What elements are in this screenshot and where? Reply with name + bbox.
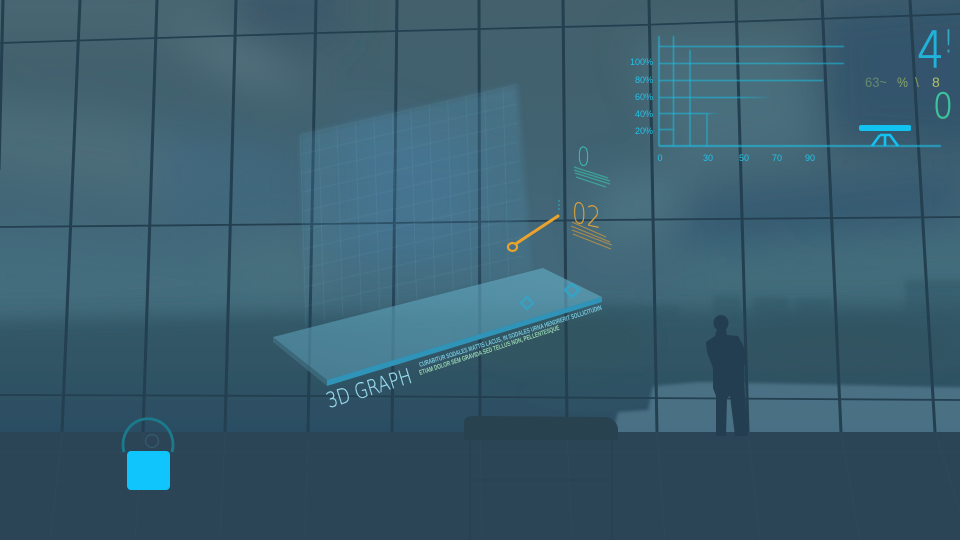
chart y axis labels: 60% [635, 92, 653, 102]
chart x axis labels: 50 [739, 153, 749, 163]
chart x axis labels: 90 [805, 153, 815, 163]
icon: padlock [123, 419, 173, 490]
caption text: ETIAM DOLOR SEM GRAVIDA SED TELLUS NON, PELLENTESQUE [418, 325, 561, 377]
chart y axis labels: 80% [635, 75, 653, 85]
chart y axis labels [630, 57, 653, 136]
chart x axis labels: 0 [657, 153, 663, 163]
readout text: 63~ [865, 74, 887, 90]
chart y axis labels: 20% [635, 126, 653, 136]
icon: plate marker right [565, 284, 579, 297]
chart x axis labels [657, 153, 815, 163]
landscape: hills and trees [0, 304, 960, 460]
counter: large cyan number: ! [944, 25, 953, 60]
person silhouette [706, 315, 748, 436]
line chart grid [659, 36, 941, 146]
callout 01: teal number and lines: 0 [577, 142, 590, 173]
chart x axis labels: 70 [772, 153, 782, 163]
icon: plate marker left [521, 297, 533, 309]
icon: balance platform [859, 125, 911, 146]
callout 02: orange number and lines [571, 195, 612, 249]
counter: green number: 0 [933, 87, 953, 127]
chart x axis labels: 30 [703, 153, 713, 163]
counter: large cyan number: 4 [917, 21, 944, 79]
callout 01: teal number and lines [574, 142, 610, 187]
readout text: \ [915, 74, 919, 90]
3D graph: floor plate [273, 268, 602, 386]
chart y axis labels: 40% [635, 109, 653, 119]
distant city skyline [600, 280, 960, 330]
caption text: CURABITUR SODALES MATTIS LACUS, IN SODALES URNA HENDRERIT SOLLICITUDIN [418, 305, 603, 369]
window frame [0, 0, 960, 432]
readout text [865, 74, 940, 90]
river water [612, 382, 960, 436]
chart y axis labels: 100% [630, 57, 653, 67]
3D graph: vertical grid panel [300, 85, 532, 326]
readout text: 8 [932, 74, 940, 90]
readout text: % [897, 74, 908, 90]
callout 02: orange number and lines: 02 [572, 195, 601, 235]
heading: 3D GRAPH: 3D GRAPH [323, 364, 415, 413]
connector: orange pointer [508, 200, 559, 251]
floor [0, 432, 960, 540]
bench silhouette [464, 416, 618, 540]
